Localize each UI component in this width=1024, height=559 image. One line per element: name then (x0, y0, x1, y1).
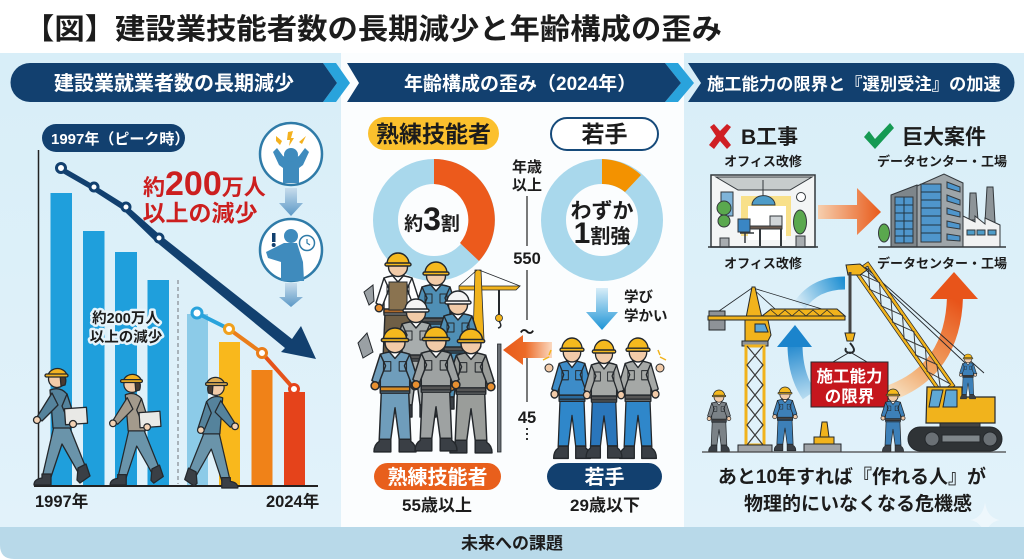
heading: age structure (347, 63, 694, 102)
worker: older man walking (185, 377, 238, 488)
arrow: learning (586, 288, 618, 330)
label: young workers: 若手 (582, 121, 628, 147)
conclusion text: 物理的にいなくなる危機感 (744, 492, 972, 515)
badge: skilled workers (374, 463, 501, 490)
label: B work: B工事 (741, 125, 798, 149)
label: skilled workers (368, 117, 499, 150)
worker: man walking (34, 368, 90, 485)
worker: signalling (773, 387, 797, 451)
icon: worker under time pressure (260, 219, 322, 281)
arc arrow: top fading blue (800, 283, 845, 305)
conclusion text (718, 465, 986, 515)
label: data center and factory: データセンター・工場 (877, 154, 1007, 169)
chart note: 以上の減少 (90, 329, 163, 346)
label: young workers (551, 118, 658, 150)
donut chart: skilled share (386, 159, 495, 268)
callout: over 2 million decrease (142, 165, 266, 226)
label: skilled workers: 熟練技能者 (376, 121, 491, 147)
age scale: 45 (518, 409, 536, 427)
arrow: knowledge transfer to skilled side (503, 335, 552, 365)
worker: on crane (959, 354, 977, 399)
donut chart: skilled share: 約3割 (404, 201, 460, 237)
label: office renovation: オフィス改修 (724, 154, 802, 169)
age: 55 and over: 55歳以上 (402, 496, 472, 515)
heading: construction capacity (688, 63, 1014, 102)
bar chart: workers over time (34, 150, 318, 486)
sign: construction capacity limit: の限界 (825, 387, 875, 406)
badge: skilled workers: 熟練技能者 (388, 466, 488, 489)
age scale: 以上 (512, 177, 542, 194)
icon: stressed worker (260, 123, 322, 185)
arrow: stress to overwork (279, 188, 303, 216)
age: 29 and under: 29歳以下 (570, 496, 640, 515)
age scale: 〜 (519, 324, 535, 341)
heading: age structure: 年齢構成の歪み（2024年） (404, 72, 636, 95)
crane behind skilled workers (459, 270, 520, 340)
chart note (90, 310, 163, 346)
arc arrow: blue upward (777, 325, 812, 395)
age scale: 年歳 (512, 158, 542, 176)
donut chart: young share: わずか (570, 200, 634, 223)
axis label: 2024: 2024年 (266, 491, 319, 511)
learning label: 学び (624, 288, 653, 306)
tower crane (708, 287, 845, 452)
worker: woman walking (110, 374, 163, 485)
panel: long-term decline (0, 53, 350, 527)
worker group: skilled workers (358, 253, 501, 453)
heading: construction capacity: 施工能力の限界と『選別受注』の加速 (707, 74, 1001, 94)
panel: age structure (341, 53, 694, 527)
worker: with tablet (881, 389, 905, 452)
learning label (624, 288, 668, 325)
label: megaprojects: 巨大案件 (902, 126, 986, 149)
sign: construction capacity limit: 施工能力 (816, 366, 882, 386)
arrow: office to data center (818, 188, 881, 235)
title: 【図】建設業技能者数の長期減少と年齢構成の歪み (24, 13, 722, 46)
ground line (702, 451, 1006, 453)
sparkle (970, 502, 1000, 538)
footer band (0, 527, 1024, 559)
footer band: 未来への課題 (461, 534, 563, 553)
panel: construction capacity (684, 53, 1024, 538)
worker group: young workers (543, 338, 666, 458)
trend line: recent years (192, 308, 298, 394)
label: data center and factory lower: データセンター・工場 (877, 256, 1007, 271)
heading: long-term decline (11, 63, 350, 102)
chart note: 約200万人 (92, 310, 160, 327)
age scale (512, 158, 542, 441)
age scale: 550 (513, 250, 541, 268)
heading: long-term decline: 建設業就業者数の長期減少 (54, 71, 294, 95)
illustration: office (708, 175, 818, 247)
mobile crane (833, 264, 1002, 451)
arrow: overwork to exit (279, 283, 303, 307)
worker: with laptop (707, 390, 731, 451)
concrete block (804, 422, 841, 452)
label: office renovation lower: オフィス改修 (724, 256, 802, 271)
badge: young workers: 若手 (584, 466, 624, 489)
learning label: 学かい (624, 307, 668, 325)
badge: young workers (547, 463, 662, 490)
callout: over 2 million decrease: 以上の減少 (142, 200, 258, 226)
axis label: 1997: 1997年 (35, 491, 88, 511)
callout: over 2 million decrease: 約200万人 (143, 165, 266, 203)
illustration: data center and factory (878, 174, 1006, 247)
decline trend arrow (56, 164, 316, 359)
sign: construction capacity limit (811, 362, 888, 407)
donut chart: young share: 1割強 (574, 217, 630, 250)
icon: cross (709, 124, 731, 149)
peak year label (42, 124, 189, 152)
donut chart: young share (554, 159, 650, 268)
peak year label: 1997年（ピーク時） (51, 130, 189, 148)
conclusion text: あと10年すれば『作れる人』が (718, 465, 986, 488)
icon: check (864, 123, 894, 149)
arc arrow: orange upward (890, 272, 978, 393)
